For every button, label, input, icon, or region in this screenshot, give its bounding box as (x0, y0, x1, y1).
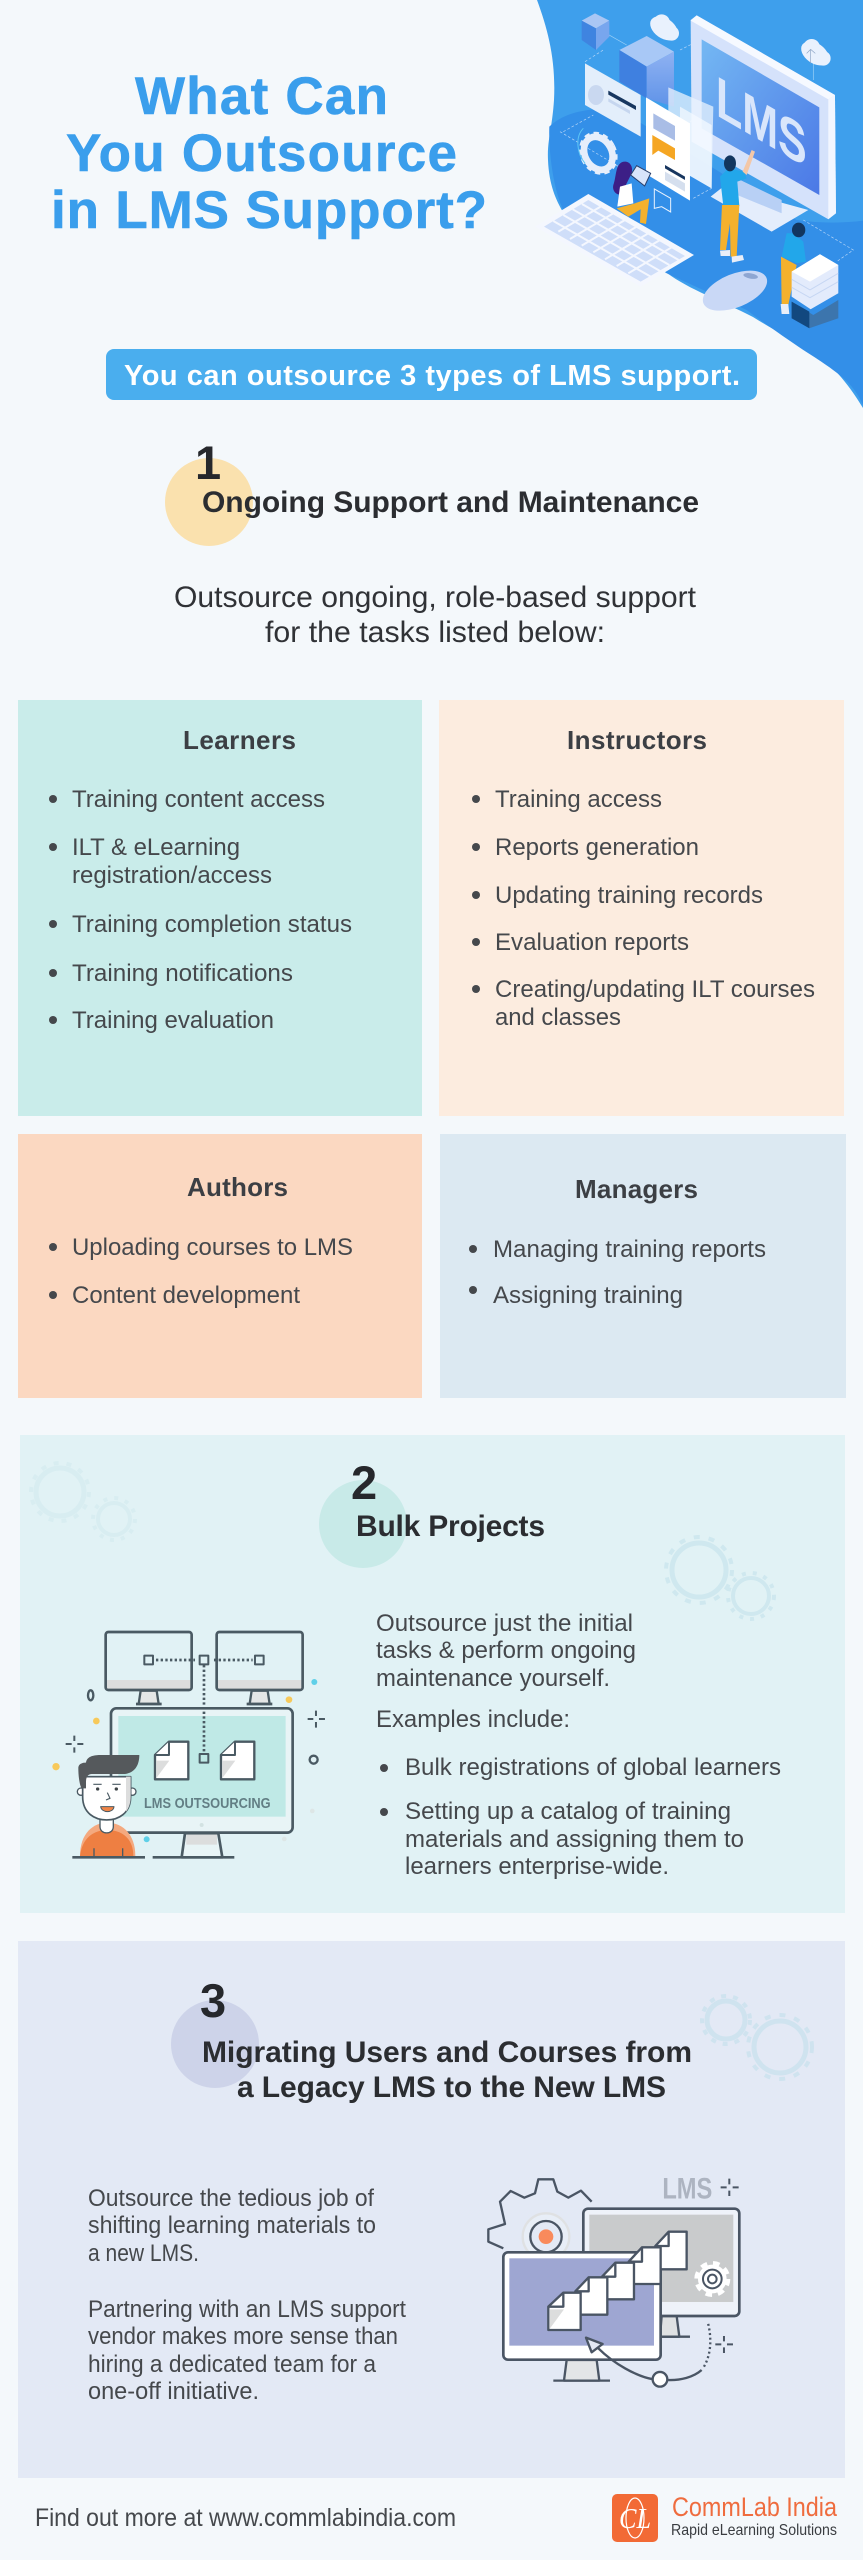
section 1 intro: for the tasks listed below: (265, 616, 605, 649)
logo: CommLab India (612, 2492, 838, 2542)
section 3 heading (171, 1974, 692, 2104)
big cube (619, 36, 674, 67)
section 2 heading (319, 1456, 545, 1568)
title: What Can (135, 67, 388, 126)
woman (613, 162, 651, 224)
background gears (31, 1463, 774, 1619)
screen (702, 39, 819, 195)
subtitle pill: You can outsource 3 types of LMS support. (124, 360, 740, 392)
section 2 text: Bulk registrations of global learners (405, 1754, 781, 1781)
panel: authors: Authors (187, 1172, 288, 1202)
illustration: migrating documents between monitors (488, 2172, 739, 2387)
section 2 text: learners enterprise-wide. (405, 1853, 669, 1880)
blue blob (537, 0, 863, 408)
document (646, 97, 690, 201)
panel: learners: Training content access (72, 786, 325, 813)
panel: instructors: Evaluation reports (495, 929, 689, 956)
man standing (720, 150, 755, 263)
cloud left (646, 11, 682, 45)
section 2 heading: Bulk Projects (356, 1510, 545, 1543)
panel: instructors: and classes (495, 1004, 621, 1031)
background gears (702, 1996, 812, 2079)
man at server (781, 223, 806, 314)
person (72, 1755, 145, 1857)
server stack (792, 300, 838, 328)
illustration: LMS outsourcing monitors and person (52, 1632, 325, 1857)
panel: learners: ILT & eLearning (72, 834, 240, 861)
panel: managers: Managers (575, 1174, 698, 1204)
monitor stand (711, 187, 808, 232)
logo: CommLab India: CommLab India (672, 2492, 838, 2522)
section 2 text (376, 1610, 781, 1880)
panel: migrating users and courses (18, 1941, 845, 2478)
section 3 heading: 3 (200, 1974, 226, 2027)
section 1 heading (165, 436, 699, 546)
back monitor (583, 2209, 739, 2337)
title (51, 67, 487, 240)
left monitor (106, 1632, 192, 1704)
section 1 heading: Ongoing Support and Maintenance (202, 486, 699, 519)
panel: learners: Learners (183, 725, 296, 755)
dashed connectors (560, 40, 853, 262)
panel: instructors: Instructors (567, 725, 707, 755)
section 2 text: Setting up a catalog of training (405, 1798, 731, 1825)
panel: learners: Training evaluation (72, 1007, 274, 1034)
panel: instructors: Updating training records (495, 882, 763, 909)
big monitor (111, 1708, 293, 1857)
section 2 text: Examples include: (376, 1706, 570, 1733)
keyboard (535, 194, 694, 287)
section 3 text: one-off initiative. (88, 2378, 259, 2405)
title: You Outsource (66, 124, 457, 183)
LMS label: LMS (662, 2172, 712, 2205)
section 3 text: shifting learning materials to (88, 2212, 376, 2239)
panel: instructors: Reports generation (495, 834, 699, 861)
panel: managers: Managing training reports (493, 1236, 766, 1263)
speech bubble outline (654, 189, 671, 212)
logo: CommLab India: Rapid eLearning Solutions (671, 2522, 837, 2539)
section 3 text (88, 2185, 406, 2405)
section 3 heading: a Legacy LMS to the New LMS (237, 2071, 666, 2104)
section 3 heading: Migrating Users and Courses from (202, 2036, 692, 2069)
logo: CommLab India: CL (619, 2504, 651, 2535)
sparkles (715, 2179, 739, 2353)
section 2 text: maintenance yourself. (376, 1665, 610, 1692)
section 1 intro (174, 581, 697, 649)
panel: authors: Content development (72, 1282, 300, 1309)
section 2 heading: 2 (351, 1456, 377, 1509)
gear (574, 127, 623, 179)
section 3 text: a new LMS. (88, 2240, 199, 2267)
section 1 intro: Outsource ongoing, role-based support (174, 581, 697, 614)
mouse (697, 262, 773, 319)
screen label: LMS OUTSOURCING (144, 1796, 271, 1812)
front monitor (503, 2252, 661, 2381)
panel: managers: Assigning training (493, 1282, 683, 1309)
right monitor (217, 1632, 303, 1704)
LMS on screen: LMS (716, 64, 807, 180)
floor (549, 109, 863, 405)
panel: learners: Training notifications (72, 960, 293, 987)
gear outline (488, 2179, 592, 2260)
section 2 text: Outsource just the initial (376, 1610, 633, 1637)
panel: managers (440, 1134, 846, 1398)
section 2 text: materials and assigning them to (405, 1826, 744, 1853)
subtitle pill (106, 349, 757, 400)
panel: bulk projects (20, 1435, 845, 1913)
section 3 text: vendor makes more sense than (88, 2323, 398, 2350)
panel: authors (18, 1134, 422, 1398)
panel: learners: registration/access (72, 862, 272, 889)
section 2 text: tasks & perform ongoing (376, 1637, 636, 1664)
panel: instructors (439, 700, 844, 1116)
panel: instructors: Training access (495, 786, 662, 813)
document icons (155, 1742, 254, 1779)
section 3 text: hiring a dedicated team for a (88, 2351, 377, 2378)
panel: learners (18, 700, 422, 1116)
arrow (586, 2322, 710, 2387)
section 3 text: Outsource the tedious job of (88, 2185, 374, 2212)
monitor (691, 15, 836, 219)
dotted links (156, 1660, 253, 1753)
panel: authors: Uploading courses to LMS (72, 1234, 353, 1261)
cloud right (797, 36, 833, 70)
panel: learners: Training completion status (72, 911, 352, 938)
footer link text: Find out more at www.commlabindia.com (35, 2504, 456, 2532)
title: in LMS Support? (51, 181, 487, 240)
stacked documents (548, 2232, 687, 2330)
section 3 text: Partnering with an LMS support (88, 2296, 406, 2323)
translucent pages (668, 87, 713, 188)
panel: instructors: Creating/updating ILT courses (495, 976, 815, 1003)
section 1 heading: 1 (195, 436, 221, 489)
small cube (582, 13, 609, 28)
hero illustration: LMS monitor with people on blue blob (535, 0, 863, 408)
profile card (585, 63, 641, 137)
decorative dots and marks (52, 1679, 325, 1842)
